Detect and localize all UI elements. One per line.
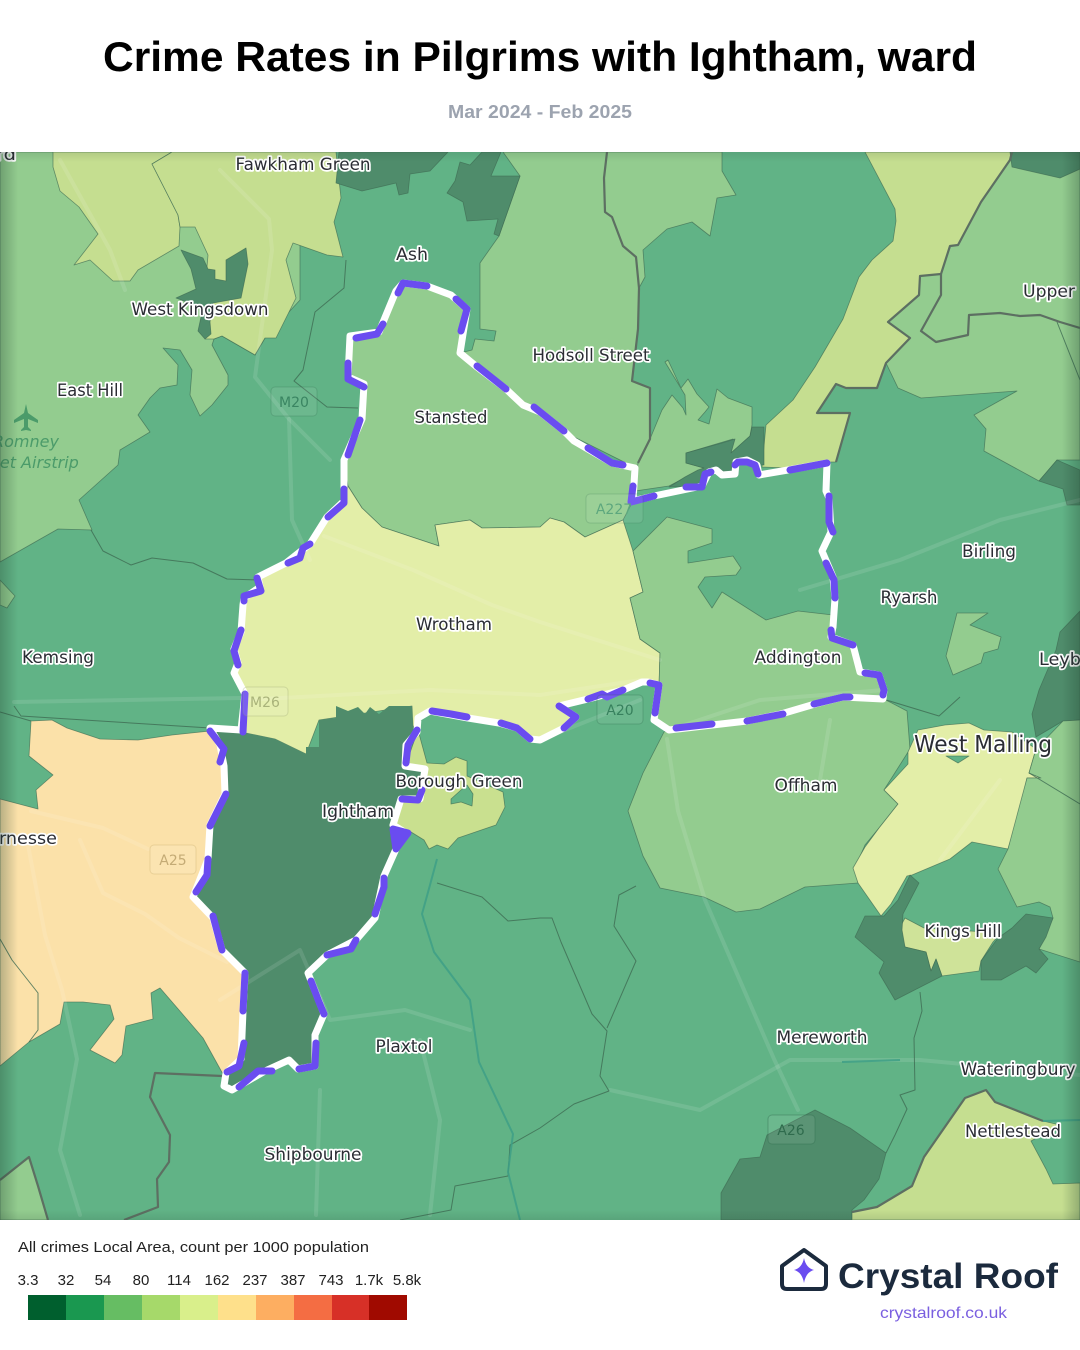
label: Kemsing: Kemsing <box>22 648 94 668</box>
shield: A20 <box>597 695 643 724</box>
legend colour scale <box>28 1295 407 1320</box>
shield: A25 <box>150 845 196 874</box>
legend values: 1.7k <box>355 1272 384 1289</box>
label: Offham: Offham <box>774 776 838 796</box>
shield: M20: M20 <box>279 395 309 411</box>
subtitle: date range: Mar 2024 - Feb 2025 <box>448 102 632 122</box>
label: Birling: Birling <box>962 542 1016 562</box>
label: Westerham cut off: rnesse <box>0 829 57 849</box>
label: Upper: Upper <box>1023 282 1075 302</box>
legend values: 3.3 <box>18 1272 38 1289</box>
icon: airfield plane <box>14 404 38 431</box>
legend values: 80 <box>133 1272 149 1289</box>
label: Borough Green: Borough Green <box>396 772 522 792</box>
shield: M26 <box>243 687 288 716</box>
legend values: 387 <box>280 1272 306 1289</box>
label: Mereworth: Mereworth <box>776 1028 868 1048</box>
label: Romney Street Airstrip <box>0 436 78 472</box>
legend values: 162 <box>204 1272 230 1289</box>
thick district boundaries <box>0 152 1080 1220</box>
shield: A20: A20 <box>606 703 634 719</box>
label: Kings Hill: Kings Hill <box>924 922 1002 942</box>
boundary lines <box>0 260 1080 1220</box>
logo url: crystalroof.co.uk <box>880 1305 1008 1322</box>
legend values: 743 <box>318 1272 344 1289</box>
label: East Hill: East Hill <box>57 381 123 401</box>
faint roads <box>14 160 1080 1215</box>
river <box>422 859 1080 1220</box>
legend values: 237 <box>242 1272 268 1289</box>
map panel <box>0 145 1080 1220</box>
label: Plaxtol: Plaxtol <box>376 1037 432 1057</box>
shield: A227 <box>586 494 643 523</box>
white boundary line <box>193 283 884 1090</box>
label: Nettlestead: Nettlestead <box>965 1122 1061 1142</box>
legend values: 54 <box>95 1272 111 1289</box>
legend heading: All crimes Local Area, count per 1000 population <box>18 1239 369 1256</box>
label: Addington: Addington <box>754 648 842 668</box>
legend <box>18 1239 422 1320</box>
label: Stansted: Stansted <box>414 408 488 428</box>
logo: Crystal Roof <box>782 1250 1058 1322</box>
label: West Kingsdown: West Kingsdown <box>132 300 268 320</box>
label: Leybourne cut off: Leyb <box>1039 650 1080 670</box>
label: Wateringbury: Wateringbury <box>960 1060 1076 1080</box>
label: Ash: Ash <box>396 245 428 265</box>
ward fill: Ightham <box>193 706 425 1090</box>
icon: house with star <box>782 1250 826 1289</box>
label: Ightham: Ightham <box>322 802 394 822</box>
logo wordmark: Crystal Roof <box>838 1257 1058 1296</box>
legend values: 32 <box>58 1272 74 1289</box>
label: Ryarsh: Ryarsh <box>880 588 938 608</box>
legend values <box>18 1272 422 1289</box>
shield: A26 <box>768 1115 815 1144</box>
shield: M20 <box>271 387 317 416</box>
legend values: 114 <box>167 1272 191 1289</box>
title: Crime Rates in Pilgrims with Ightham, ward <box>103 33 977 80</box>
label: West Malling: West Malling <box>914 732 1052 758</box>
place labels <box>0 145 1080 1165</box>
shield: A25: A25 <box>159 853 187 869</box>
label: Shipbourne: Shipbourne <box>264 1145 362 1165</box>
label: Fawkham Green: Fawkham Green <box>236 155 370 175</box>
shield: A26: A26 <box>777 1123 805 1139</box>
label: Wrotham: Wrotham <box>416 615 492 635</box>
label: Hodsoll Street: Hodsoll Street <box>532 346 650 366</box>
road shields <box>150 387 815 1144</box>
purple dashes <box>196 283 884 1087</box>
shield: M26: M26 <box>250 695 280 711</box>
ward boundary: Pilgrims with Ightham <box>193 283 884 1090</box>
legend values: 5.8k <box>393 1272 422 1289</box>
shield: A227: A227 <box>596 502 632 518</box>
